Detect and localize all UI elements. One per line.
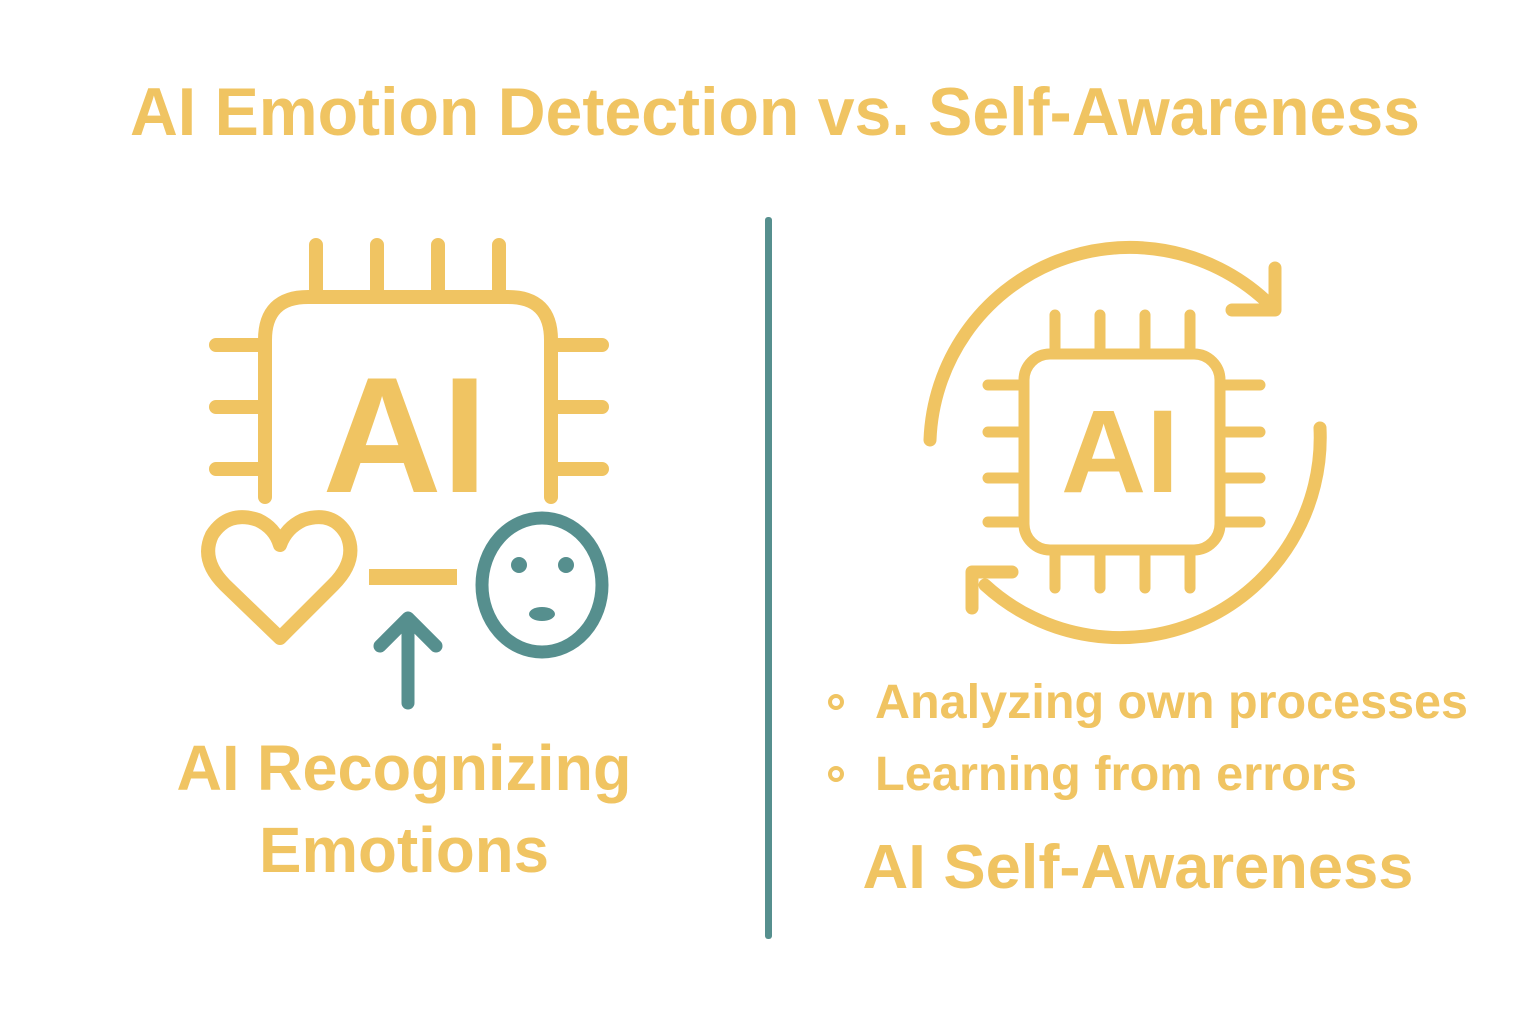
- left label: AI Recognizing: [176, 732, 632, 804]
- bullet list: Learning from errors: [875, 748, 1357, 801]
- icon: AI chip left: [216, 245, 602, 527]
- connector line: [369, 569, 457, 585]
- icon: AI chip right: AI: [1061, 386, 1179, 518]
- bullet list: [830, 676, 1468, 801]
- icon: face: [482, 518, 602, 652]
- bullet list: Analyzing own processes: [875, 676, 1468, 729]
- left label: [176, 732, 632, 886]
- divider: [765, 217, 772, 939]
- icon: AI chip right: [988, 315, 1260, 588]
- icon: AI chip left: AI: [322, 343, 488, 527]
- arrow: up: [380, 618, 436, 703]
- icon: heart: [208, 517, 350, 638]
- title: AI Emotion Detection vs. Self-Awareness: [130, 74, 1420, 150]
- left label: Emotions: [259, 814, 549, 886]
- icon: cycle arrows: [930, 247, 1320, 638]
- right label: AI Self-Awareness: [862, 833, 1414, 902]
